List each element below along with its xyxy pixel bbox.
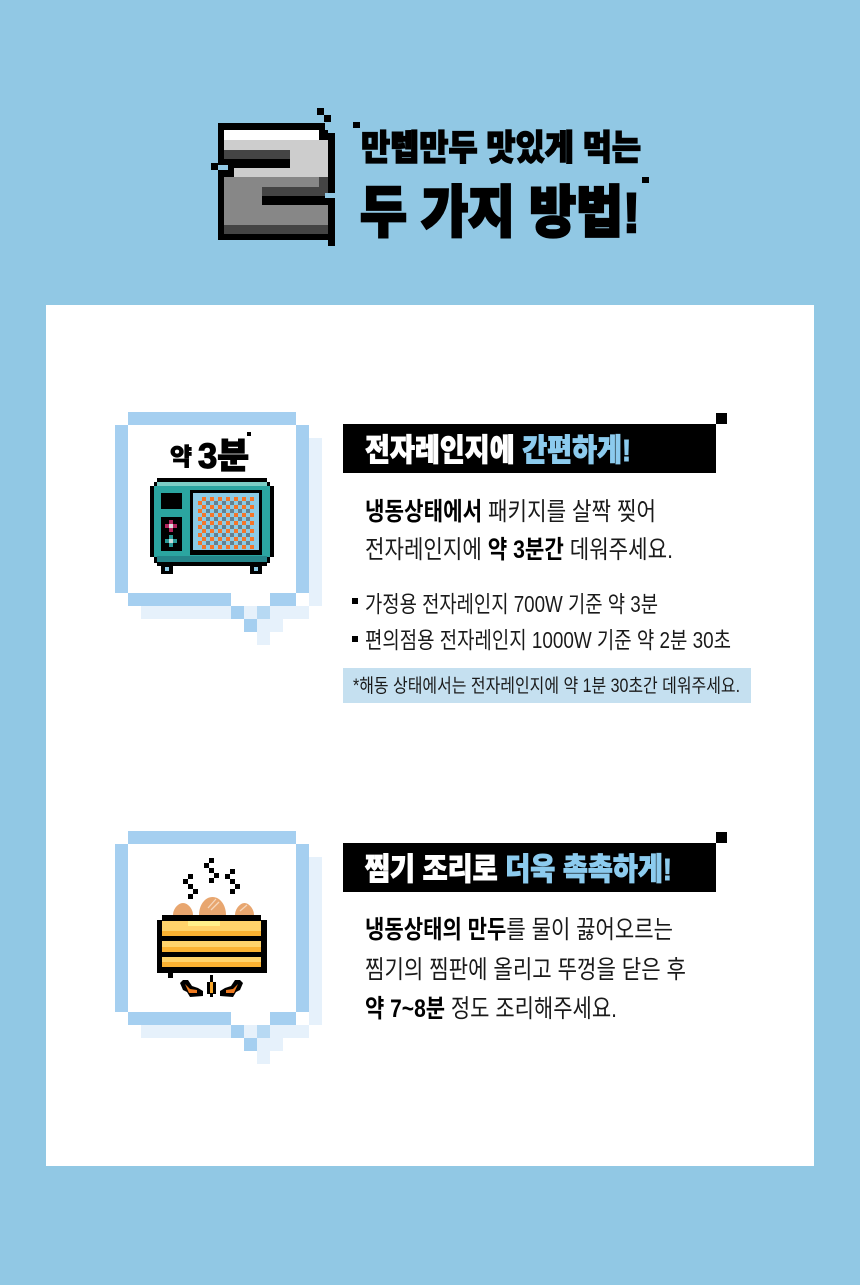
dumplings [173, 897, 254, 915]
body text: microwave instructions [365, 498, 673, 564]
section: steamer [115, 831, 727, 1064]
body text: microwave instructions: 전자레인지에 약 3분간 데워주세요. [365, 536, 673, 564]
header [211, 108, 649, 246]
title text [353, 122, 649, 244]
body text: steamer instructions: 찜기의 찜판에 올리고 뚜껑을 닫은 후 [365, 956, 686, 984]
bullet list: wattage times [352, 591, 731, 653]
steamer body [162, 915, 261, 920]
heading bar: microwave [343, 413, 727, 473]
body text: microwave instructions: 냉동상태에서 패키지를 살짝 찢어 [365, 498, 656, 526]
body text: steamer instructions [365, 916, 686, 1023]
badge: about 3 minutes: 3분 [198, 437, 249, 476]
body text: steamer instructions: 약 7~8분 정도 조리해주세요. [365, 995, 617, 1023]
icon: speech bubble frame [115, 831, 322, 1064]
flames [180, 975, 243, 997]
body text: steamer instructions: 냉동상태의 만두를 물이 끓어오르는 [365, 916, 673, 944]
bullet list: wattage times: 편의점용 전자레인지 1000W 기준 약 2분 30초 [365, 627, 731, 653]
panel: white card [46, 305, 814, 1166]
icon: steamer with dumplings [157, 858, 267, 997]
title text: 만렙만두 맛있게 먹는 [361, 129, 641, 168]
note: defrosted state [343, 668, 751, 703]
icon: microwave [150, 478, 274, 574]
bullet list: wattage times: 가정용 전자레인지 700W 기준 약 3분 [365, 591, 658, 617]
icon: speech bubble frame [115, 412, 322, 645]
heading bar: steamer: 찜기 조리로 더욱 촉촉하게! [365, 852, 672, 887]
section: microwave [115, 412, 751, 703]
heading bar: steamer [343, 832, 727, 892]
heading bar: microwave: 전자레인지에 간편하게! [365, 433, 631, 468]
note: defrosted state: *해동 상태에서는 전자레인지에 약 1분 30초간 데워주세요. [353, 675, 740, 697]
icon: pixel number 2 [211, 108, 335, 246]
badge: about 3 minutes [170, 432, 251, 476]
title text: 두 가지 방법! [360, 181, 640, 244]
steam [183, 858, 240, 899]
badge: about 3 minutes: 약 [170, 444, 192, 471]
